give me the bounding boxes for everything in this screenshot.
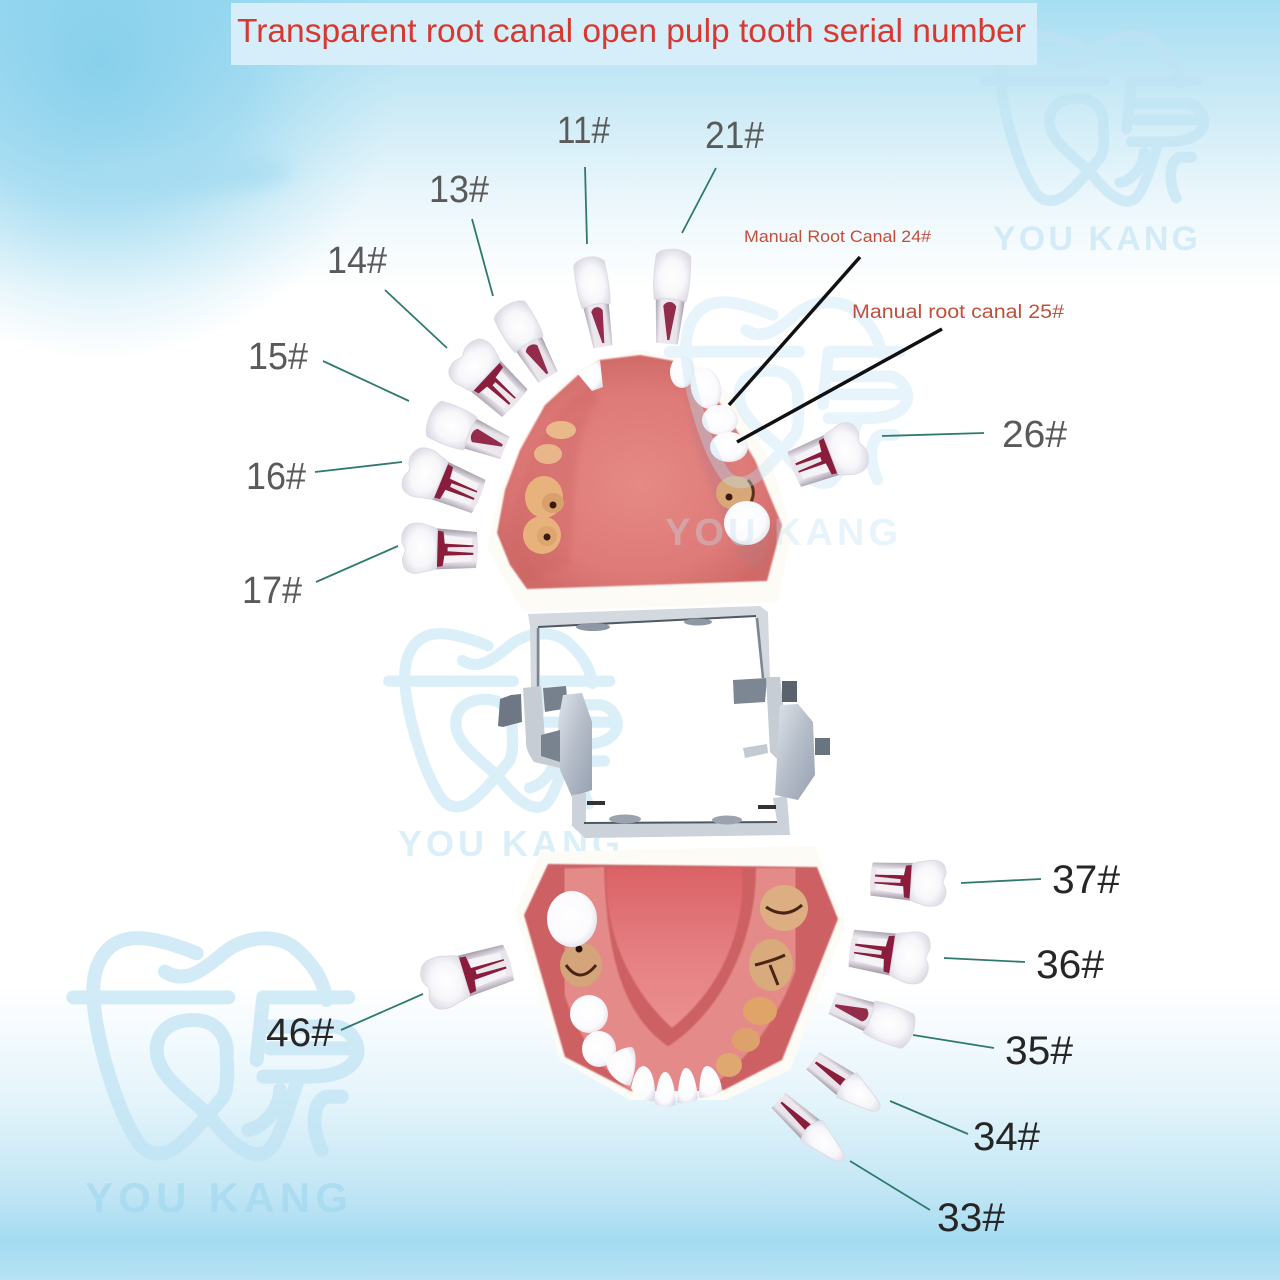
watermark: middle left xyxy=(389,634,620,864)
label 33: 33# xyxy=(937,1196,1006,1240)
watermark: top right xyxy=(986,35,1204,258)
lower alveolar ridge xyxy=(575,868,785,1080)
upper ivory base xyxy=(487,350,792,612)
label 46: 46# xyxy=(266,1011,335,1055)
watermark: bottom left: YOU KANG xyxy=(85,1174,348,1221)
lower dental arch xyxy=(515,846,845,1107)
label 36: 36# xyxy=(1036,943,1105,987)
tooth 26 xyxy=(784,419,873,494)
black pointer lines to teeth 24 and 25 xyxy=(729,257,942,442)
tooth 35 xyxy=(826,985,919,1051)
upper gum and palate xyxy=(497,355,782,589)
tooth 36 xyxy=(846,922,934,986)
label 17: 17# xyxy=(242,570,302,612)
tooth 46 xyxy=(417,937,518,1013)
label: manual root canal 24: Manual Root Canal 24# xyxy=(744,227,932,246)
tooth 11 xyxy=(572,255,619,349)
leader lines xyxy=(315,167,1041,1210)
label: manual root canal 25: Manual root canal 25# xyxy=(852,302,1064,323)
upper tooth sockets xyxy=(523,421,754,554)
lower floor and tongue xyxy=(607,868,742,1028)
tooth 37 xyxy=(869,856,948,907)
label 35: 35# xyxy=(1005,1029,1074,1073)
upper dental arch xyxy=(487,350,792,612)
watermark: bottom left xyxy=(73,938,357,1221)
label 13: 13# xyxy=(429,169,489,211)
tooth 14 xyxy=(443,333,534,423)
label 15: 15# xyxy=(248,336,308,378)
tooth 33 xyxy=(769,1089,853,1171)
title banner: Transparent root canal open pulp tooth serial number xyxy=(237,12,1026,49)
tooth 21 xyxy=(649,248,692,345)
watermark: centre over the model xyxy=(665,302,907,554)
label 11: 11# xyxy=(557,110,610,152)
title banner xyxy=(231,3,1037,65)
tooth 15 xyxy=(422,398,513,466)
label 37: 37# xyxy=(1052,858,1121,902)
lower tooth sockets xyxy=(560,885,808,1077)
lower teeth in place xyxy=(547,891,722,1107)
label 14: 14# xyxy=(327,240,387,282)
tooth 17 xyxy=(401,523,479,575)
upper teeth in place xyxy=(577,356,770,545)
watermark: top right: YOU KANG xyxy=(993,220,1198,258)
tooth 16 xyxy=(397,443,490,520)
label 16: 16# xyxy=(246,456,306,498)
lower ivory base xyxy=(515,846,845,1100)
tooth 13 xyxy=(491,296,564,386)
articulator metal frame xyxy=(498,606,830,838)
label 21: 21# xyxy=(705,115,764,157)
lower gum xyxy=(524,864,838,1091)
label 34: 34# xyxy=(973,1115,1041,1159)
upper gum shading xyxy=(510,385,600,580)
watermark: centre over the model: YOU KANG xyxy=(665,512,898,554)
label 26: 26# xyxy=(1002,414,1067,456)
tooth 34 xyxy=(804,1047,888,1122)
watermark: middle left: YOU KANG xyxy=(398,823,620,864)
